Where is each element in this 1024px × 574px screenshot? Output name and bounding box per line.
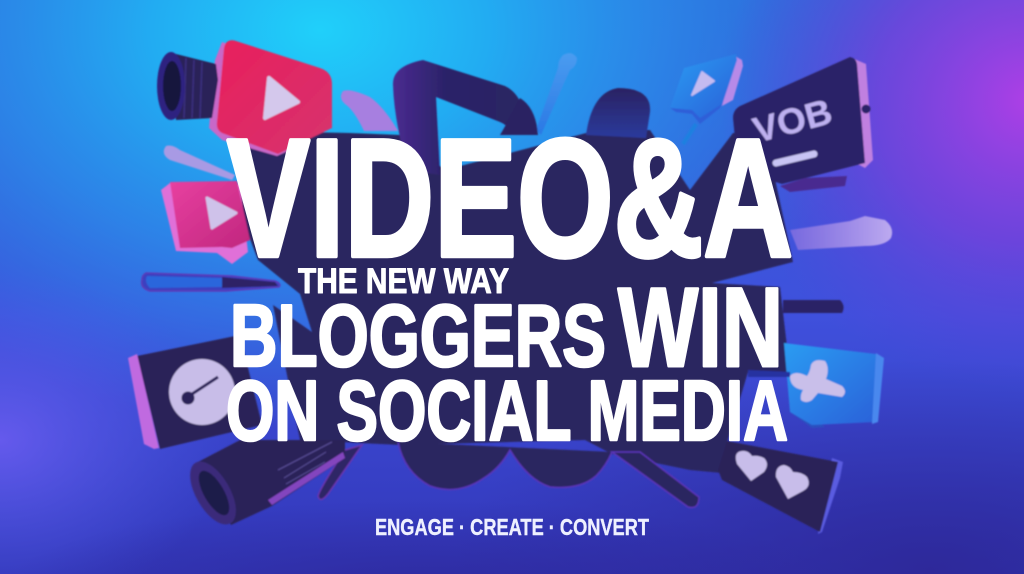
stick lilac [164, 146, 235, 180]
play triangle [265, 78, 298, 118]
headline: WIN: WIN [618, 265, 783, 390]
check circle [169, 359, 235, 425]
rod right [783, 300, 844, 313]
subhead: THE NEW WAY: THE NEW WAY [298, 262, 509, 301]
headline: BLOGGERS: BLOGGERS [230, 286, 606, 385]
bubble play icon [692, 72, 714, 95]
camera body [209, 42, 290, 156]
tagline: ENGAGE · CREATE · CONVERT [375, 514, 649, 540]
title [226, 104, 793, 459]
curved lilac stick [341, 90, 398, 131]
heart two [776, 465, 809, 499]
splash rod lower right [612, 452, 699, 508]
blue bar [142, 273, 280, 291]
puzzle glyph [790, 360, 845, 402]
tablet bar [776, 154, 814, 163]
loop shape top [393, 60, 527, 175]
icon: blue chat bubble with puzzle [784, 343, 884, 428]
icon: dark tablet with text [733, 57, 873, 192]
icon: left phone with check [128, 335, 262, 449]
dark splash behind title [235, 130, 793, 473]
heart one [736, 451, 767, 481]
bubble play triangle [207, 198, 236, 228]
icon: magenta chat bubble with play [161, 181, 250, 264]
central illustration [128, 40, 892, 534]
pill right [790, 216, 892, 250]
check mark [182, 377, 218, 404]
dark blob top [586, 88, 650, 138]
headline: VIDEO&A: VIDEO&A [227, 104, 793, 292]
headline: ON SOCIAL MEDIA: ON SOCIAL MEDIA [226, 364, 788, 459]
dark strip by MEDIA [748, 370, 790, 377]
splash lobes bottom [398, 442, 612, 490]
camera lens [157, 52, 218, 120]
splash rod lower left [318, 445, 362, 500]
tablet text: VOB [748, 90, 836, 151]
bubble stem [683, 124, 696, 144]
dark blob left of drop [500, 98, 538, 135]
tablet stand [780, 176, 847, 192]
icon: dark bubble with hearts [718, 441, 843, 534]
drop top [536, 53, 577, 135]
icon: red video camera [157, 40, 332, 156]
icon: blue chat bubble with play [670, 54, 743, 144]
icon: lower left camera lens [181, 440, 345, 532]
